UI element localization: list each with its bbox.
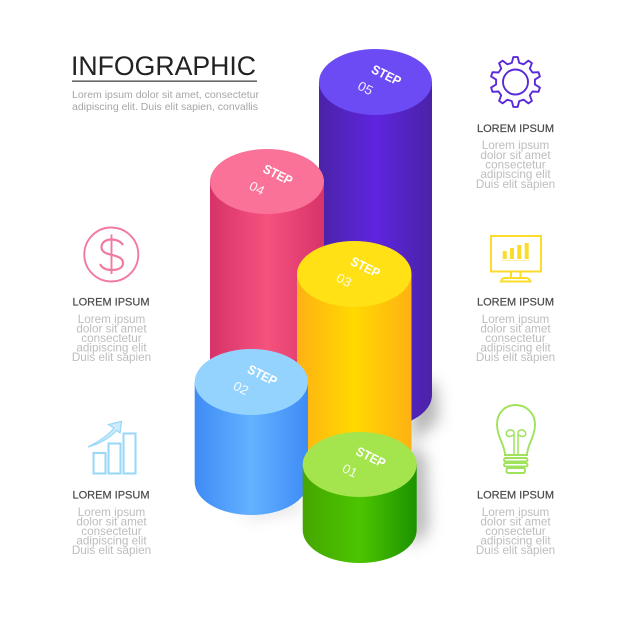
block: left middle bbox=[72, 296, 151, 364]
shadows bbox=[240, 380, 438, 548]
cylinder: step 04: STEP bbox=[261, 161, 295, 188]
intro text: adipiscing elit. Duis elit sapien, convallis bbox=[72, 101, 258, 113]
block: right middle bbox=[476, 296, 555, 364]
cylinder: step 05: STEP bbox=[369, 62, 404, 89]
block: right bottom: adipiscing elit bbox=[480, 534, 551, 548]
icon: growth chart bbox=[88, 422, 136, 474]
cylinder: step 05 bbox=[319, 49, 432, 428]
block: left bottom: Duis elit sapien bbox=[72, 544, 151, 557]
block: left bottom: adipiscing elit bbox=[76, 534, 147, 548]
block: right bottom: dolor sit amet bbox=[480, 516, 551, 528]
block: left bottom: dolor sit amet bbox=[76, 516, 147, 528]
cylinder: step 03: 03 bbox=[334, 270, 354, 290]
block: left middle: Lorem ipsum bbox=[78, 313, 145, 326]
block: right bottom: Duis elit sapien bbox=[476, 544, 555, 557]
cylinder: step 03 bbox=[297, 241, 412, 450]
icon: monitor bbox=[491, 236, 541, 282]
block: right bottom bbox=[476, 490, 555, 557]
intro text: Lorem ipsum dolor sit amet, consectetur bbox=[72, 89, 259, 101]
block: right bottom: consectetur bbox=[485, 525, 546, 538]
block: left bottom: LOREM IPSUM bbox=[72, 490, 150, 502]
block: left middle: LOREM IPSUM bbox=[72, 296, 150, 308]
cylinder chart bbox=[195, 49, 438, 563]
block: left bottom: consectetur bbox=[81, 525, 142, 538]
block: right top: adipiscing elit bbox=[480, 168, 551, 181]
block: left middle: dolor sit amet bbox=[76, 322, 147, 336]
block: left middle: Duis elit sapien bbox=[72, 351, 151, 364]
block: left middle: consectetur bbox=[81, 332, 142, 345]
block: right middle: consectetur bbox=[485, 332, 546, 345]
block: right middle: LOREM IPSUM bbox=[477, 296, 554, 308]
block: right bottom: Lorem ipsum bbox=[482, 506, 549, 519]
block: right middle: dolor sit amet bbox=[480, 322, 551, 336]
cylinder: step 05: 05 bbox=[355, 78, 376, 98]
block: right top: Lorem ipsum bbox=[482, 139, 549, 152]
block: left middle: adipiscing elit bbox=[76, 342, 147, 354]
cylinder: step 02: STEP bbox=[245, 362, 280, 389]
cylinder: step 02: 02 bbox=[231, 378, 251, 398]
block: right middle: adipiscing elit bbox=[480, 342, 551, 354]
block: right top: Duis elit sapien bbox=[476, 178, 555, 191]
icon: gear bbox=[491, 57, 540, 107]
icon: dollar bbox=[84, 228, 138, 282]
icon: light bulb bbox=[497, 405, 535, 473]
block: right top: dolor sit amet bbox=[480, 149, 551, 162]
block: right middle: Duis elit sapien bbox=[476, 351, 555, 364]
block: left bottom: Lorem ipsum bbox=[78, 506, 145, 519]
block: right bottom: LOREM IPSUM bbox=[477, 490, 554, 502]
cylinder: step 04: 04 bbox=[247, 178, 267, 198]
cylinder: step 01 bbox=[303, 432, 417, 563]
block: left bottom bbox=[72, 490, 151, 557]
intro text bbox=[72, 89, 259, 113]
cylinder: step 03: STEP bbox=[348, 254, 383, 281]
block: right middle: Lorem ipsum bbox=[482, 313, 549, 326]
cylinder: step 02 bbox=[195, 349, 308, 515]
title: INFOGRAPHIC bbox=[71, 51, 256, 81]
cylinder: step 04 bbox=[210, 149, 324, 380]
cylinder: step 01: 01 bbox=[340, 461, 360, 480]
block: right top: LOREM IPSUM bbox=[477, 123, 554, 135]
block: right top: consectetur bbox=[485, 158, 546, 172]
block: right top bbox=[476, 123, 555, 191]
cylinder: step 01: STEP bbox=[354, 444, 388, 471]
